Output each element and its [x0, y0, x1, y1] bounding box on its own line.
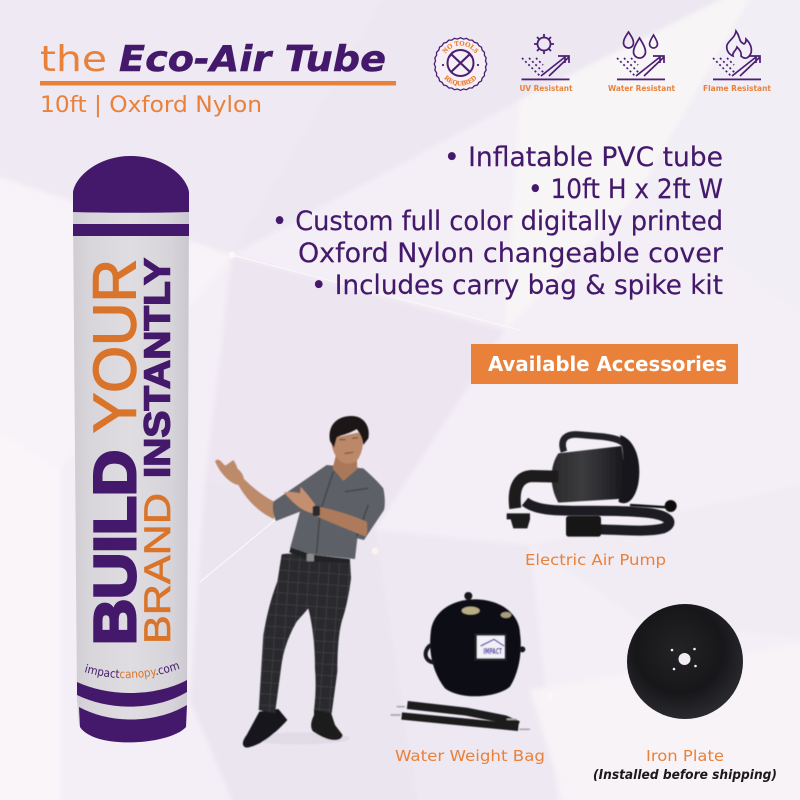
feature list: • Includes carry bag & spike kit: [311, 270, 723, 301]
water weight bag: IMPACT: [483, 647, 502, 656]
tube bottom cap: [79, 705, 187, 742]
title: Eco-Air Tube: [119, 39, 386, 80]
hose end fitting: [507, 513, 530, 528]
pump nozzle hose: [515, 476, 558, 508]
straps: [407, 705, 518, 725]
electric air pump: [507, 434, 677, 537]
icon: flame resistant: [703, 31, 771, 93]
right shoe: [311, 710, 343, 740]
valve: [464, 592, 472, 600]
available accessories banner: [471, 344, 738, 384]
highlights: [462, 607, 480, 615]
hose coupling: [566, 516, 601, 537]
shadow: [250, 732, 350, 744]
subtitle: 10ft | Oxford Nylon: [40, 93, 262, 118]
logo label: [474, 633, 507, 661]
tube text: website: impactcanopy.com: [85, 663, 180, 680]
icon: flame resistant: Flame Resistant: [703, 84, 771, 93]
icon: water resistant: Water Resistant: [608, 84, 675, 93]
icon: UV resistant: [520, 34, 573, 93]
tube text: YOUR: YOUR: [82, 259, 148, 433]
pump hose coil: [525, 502, 669, 531]
neck and open collar: [333, 455, 357, 481]
trousers: [259, 554, 351, 713]
icon: water resistant: [608, 32, 675, 93]
icon: no tools required badge: NO TOOLS: [442, 40, 479, 54]
power cord and plug: [630, 505, 667, 507]
bag body: [430, 599, 521, 696]
tube text: INSTANTLY: INSTANTLY: [136, 258, 178, 478]
watch: [313, 506, 320, 516]
feature list: • Custom full color digitally printed: [272, 206, 723, 237]
left handle: [426, 645, 435, 663]
title: [40, 39, 396, 86]
pump body: [552, 446, 628, 503]
icon: no tools required badge: REQUIRED: [444, 75, 476, 86]
title: the: [40, 39, 107, 80]
hair: [330, 416, 369, 448]
tube lower stripe: [77, 680, 187, 707]
face: [331, 432, 363, 464]
right knob: [519, 646, 525, 652]
iron plate: [627, 604, 743, 719]
left shoe: [243, 709, 287, 748]
inflatable tube: [73, 156, 189, 742]
installation note: (Installed before shipping): [593, 768, 777, 783]
shirt: [273, 465, 385, 559]
feature list: • 10ft H x 2ft W: [528, 174, 723, 205]
mouth and eyes: [339, 438, 358, 453]
left forearm and hand: [215, 460, 274, 519]
water weight bag label: Water Weight Bag: [395, 747, 545, 765]
icon: no tools required badge: [434, 37, 488, 91]
tube upper stripe: [73, 224, 189, 236]
feature list: [272, 142, 724, 301]
tube text: BUILD: BUILD: [83, 450, 148, 645]
electric air pump label: Electric Air Pump: [525, 551, 666, 569]
feature list: Oxford Nylon changeable cover: [298, 238, 724, 269]
available accessories banner: Available Accessories: [488, 352, 727, 376]
pump handle: [563, 434, 627, 452]
tube top cap: [73, 156, 189, 213]
belt: [289, 548, 350, 563]
pump end cap: [618, 435, 639, 503]
right hand: [284, 487, 315, 513]
tube text: BRAND: BRAND: [137, 493, 178, 644]
right forearm: [317, 507, 367, 537]
icon: UV resistant: UV Resistant: [520, 84, 573, 93]
feature list: • Inflatable PVC tube: [444, 142, 723, 173]
iron plate label: Iron Plate: [646, 747, 724, 765]
person presenting: [215, 416, 385, 748]
water weight bag: [391, 592, 530, 729]
